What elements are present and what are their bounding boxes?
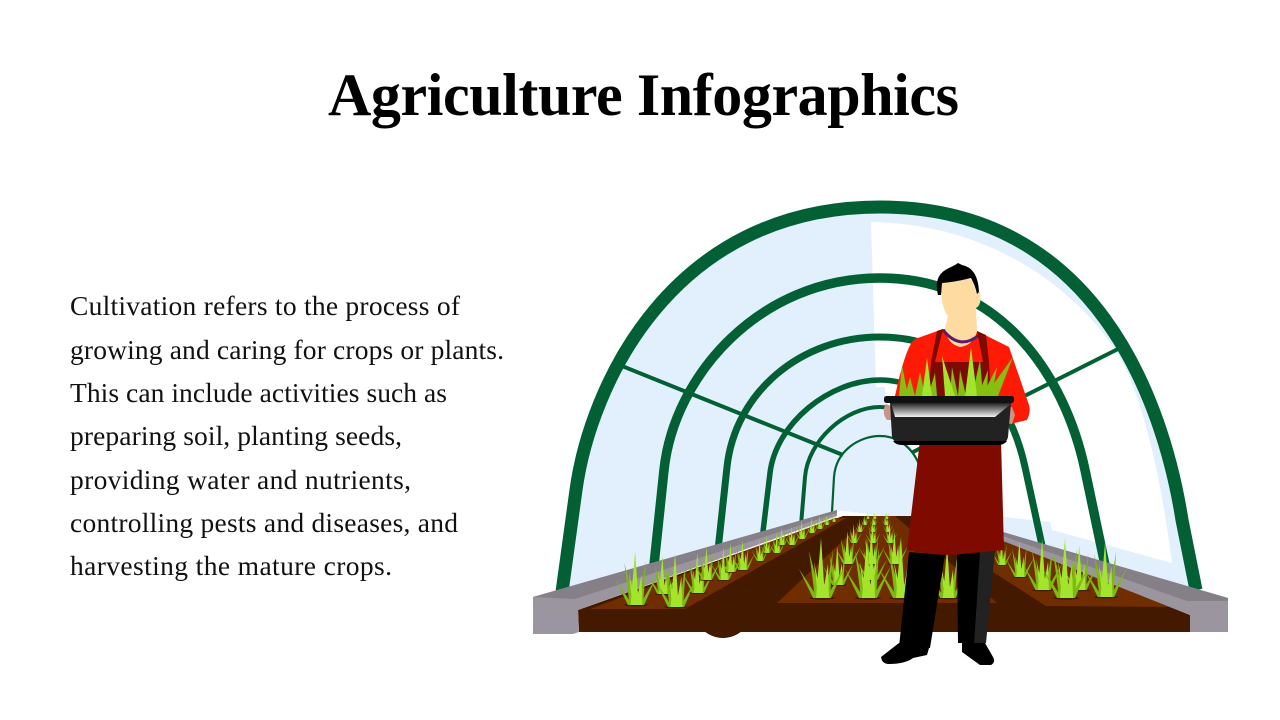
head and neck bbox=[941, 278, 980, 347]
text block: cultivation description: harvesting the mature crops. bbox=[70, 550, 392, 581]
text block: cultivation description: preparing soil, planting seeds, bbox=[70, 420, 402, 451]
shirt bbox=[895, 329, 1030, 424]
text block: cultivation description: Cultivation refers to the process of bbox=[70, 290, 461, 321]
text block: cultivation description bbox=[70, 290, 504, 581]
collar bbox=[943, 330, 979, 342]
text block: cultivation description: providing water and nutrients, bbox=[70, 464, 411, 495]
shoes bbox=[881, 643, 994, 665]
greenhouse cover bbox=[562, 207, 1196, 592]
seedlings: left bed bbox=[615, 514, 837, 608]
text block: cultivation description: growing and caring for crops or plants. bbox=[70, 334, 504, 365]
seedlings: right bed bbox=[992, 538, 1127, 600]
greenhouse frame arches bbox=[562, 207, 1196, 592]
illustration: greenhouse with farmer bbox=[533, 207, 1228, 665]
tray bbox=[884, 396, 1014, 445]
hands bbox=[884, 404, 1015, 424]
text block: cultivation description: This can include activities such as bbox=[70, 377, 447, 408]
text block: cultivation description: controlling pests and diseases, and bbox=[70, 507, 458, 538]
farmer bbox=[881, 263, 1030, 665]
plants in tray bbox=[899, 347, 1013, 396]
apron bbox=[907, 329, 1004, 555]
soil beds bbox=[578, 516, 1190, 638]
trousers bbox=[899, 550, 995, 648]
hair bbox=[937, 263, 979, 295]
left and right side beams bbox=[533, 510, 1228, 634]
title: Agriculture Infographics bbox=[328, 62, 959, 128]
seedlings: middle bed bbox=[799, 512, 968, 600]
